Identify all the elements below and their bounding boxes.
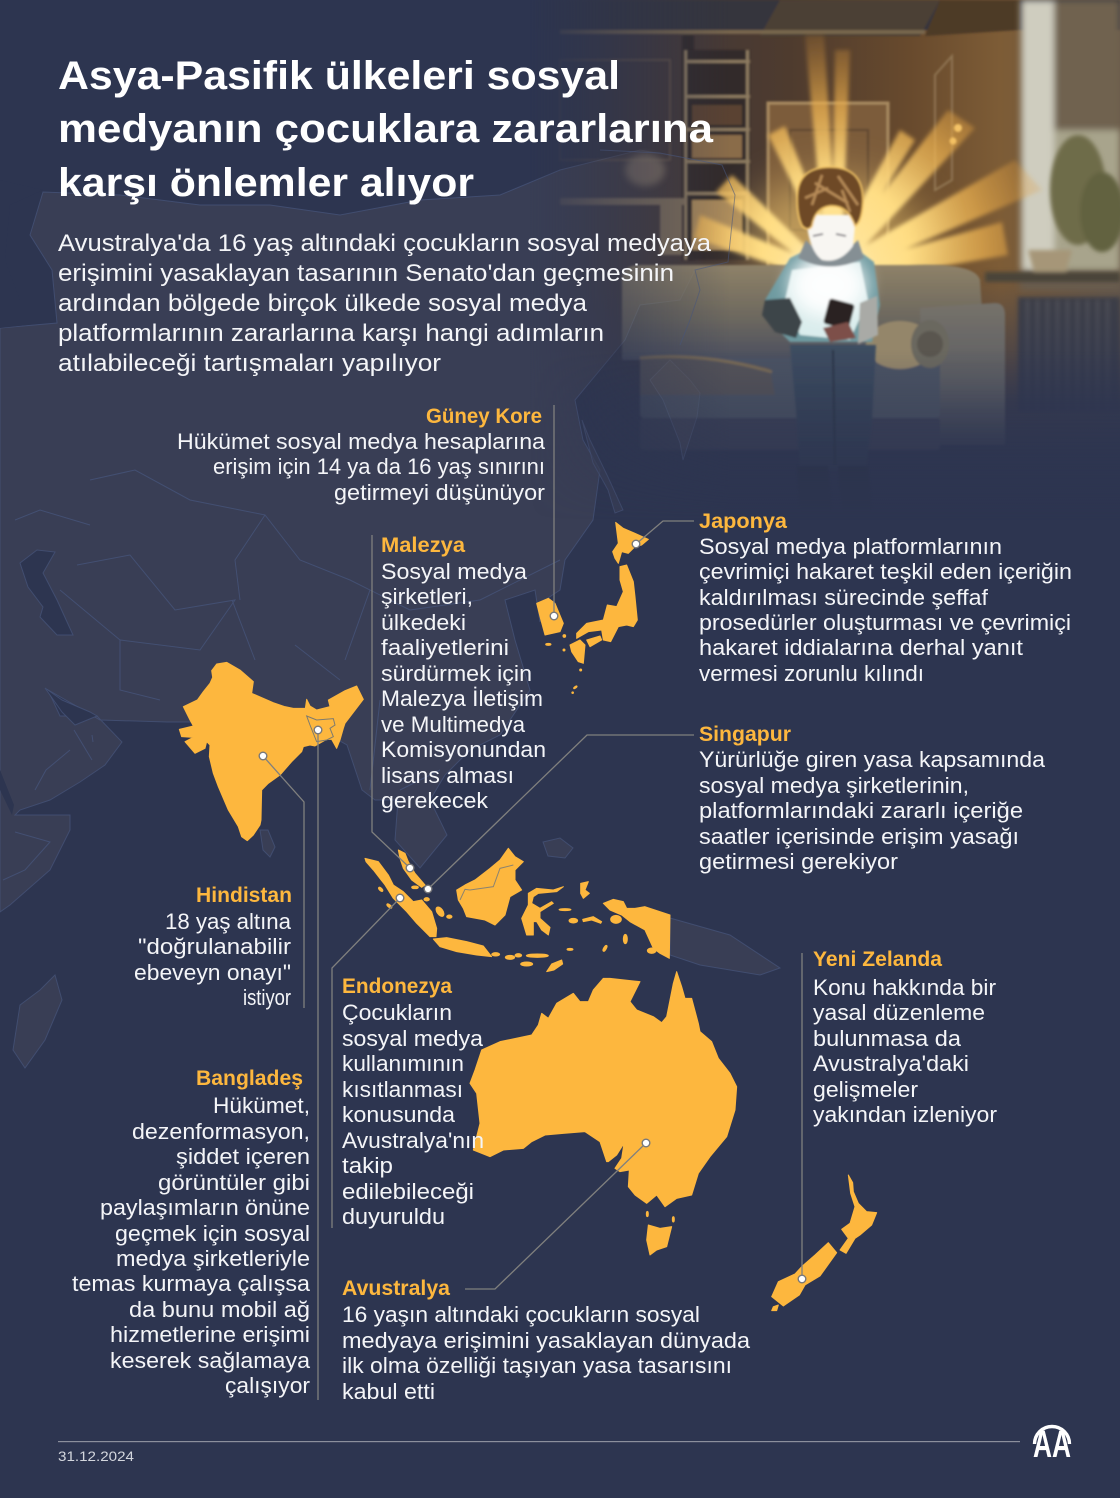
callout: Hindistan	[134, 884, 292, 1010]
logo: Anadolu Agency: AA	[1033, 1424, 1071, 1466]
callout: Güney Kore	[177, 405, 546, 505]
callout: Japonya: Japonya	[699, 510, 787, 533]
map: Australia	[470, 972, 737, 1255]
callout: Endonezya: kullanımının	[342, 1051, 464, 1076]
callout: Avustralya: Avustralya	[342, 1277, 450, 1300]
boy	[761, 166, 881, 420]
callout: Bangladeş	[72, 1067, 311, 1398]
map: India	[179, 662, 363, 841]
callout: Bangladeş: dezenformasyon,	[132, 1119, 310, 1144]
callout: Avustralya: ilk olma özelliği taşıyan yasa tasarısını	[342, 1353, 732, 1378]
callout: Bangladeş: medya şirketleriyle	[116, 1246, 310, 1271]
callout: Endonezya: Endonezya	[342, 975, 452, 998]
callout: Yeni Zelanda: yakından izleniyor	[813, 1102, 997, 1127]
location pins	[259, 540, 806, 1283]
intro text: Avustralya'da 16 yaş altındaki çocukların sosyal medyaya	[58, 230, 712, 257]
map: Japan and South Korea	[537, 522, 648, 693]
Caspian and Kara seas	[20, 550, 73, 635]
date: 31.12.2024	[58, 1448, 134, 1464]
map: New Zealand	[772, 1175, 877, 1311]
callout: Bangladeş: da bunu mobil ağ	[129, 1297, 310, 1322]
callout: Malezya: Malezya İletişim	[381, 686, 543, 711]
callout: Yeni Zelanda: yasal düzenleme	[813, 1000, 985, 1025]
callout: Singapur: sosyal medya şirketlerinin,	[699, 773, 969, 798]
callout: Bangladeş: çalışıyor	[225, 1373, 310, 1398]
sofa	[622, 265, 1005, 450]
callout: Singapur	[699, 723, 1046, 874]
intro text: erişimini yasaklayan tasarının Senato'dan geçmesinin	[58, 260, 674, 287]
callout: Endonezya: edilebileceği	[342, 1179, 474, 1204]
callout: Hindistan: istiyor	[243, 985, 291, 1010]
callout: Endonezya: Çocukların	[342, 1000, 452, 1025]
callout: Singapur: saatler içerisinde erişim yasağı	[699, 824, 1019, 849]
callout: Güney Kore: erişim için 14 ya da 16 yaş sınırını	[213, 454, 545, 479]
callout: Bangladeş: keserek sağlamaya	[110, 1348, 311, 1373]
bookshelf and fireplace	[560, 50, 750, 260]
callout: Endonezya: duyuruldu	[342, 1204, 445, 1229]
callout: Singapur: platformlarındaki zararlı içeriğe	[699, 798, 1023, 823]
callout: Malezya: lisans alması	[381, 763, 514, 788]
callout: Endonezya: konusunda	[342, 1102, 456, 1127]
Peninsular Malaysia	[398, 850, 425, 887]
callout: Güney Kore: Güney Kore	[426, 405, 542, 428]
Bangladesh	[307, 716, 335, 742]
callout: Bangladeş: Bangladeş	[196, 1067, 303, 1090]
footer rule	[58, 1441, 1020, 1442]
callout: Yeni Zelanda	[813, 948, 997, 1127]
callout: Endonezya: sosyal medya	[342, 1026, 484, 1051]
callout: Avustralya: 16 yaşın altındaki çocukların sosyal	[342, 1302, 700, 1327]
callout: Hindistan: Hindistan	[196, 884, 292, 907]
Borneo	[457, 848, 523, 925]
callout: Bangladeş: geçmek için sosyal	[115, 1221, 310, 1246]
callout: Malezya: şirketleri,	[381, 584, 473, 609]
callout: Bangladeş: Hükümet,	[213, 1093, 310, 1118]
callout: Malezya: ülkedeki	[381, 610, 466, 635]
connector lines	[263, 405, 802, 1400]
callout: Hindistan: ebeveyn onayı"	[134, 960, 291, 985]
callout: Bangladeş: temas kurmaya çalışsa	[72, 1271, 311, 1296]
callout: Endonezya	[342, 975, 484, 1229]
callout: Yeni Zelanda: bulunmasa da	[813, 1026, 962, 1051]
callout: Bangladeş: şiddet içeren	[176, 1144, 310, 1169]
callout: Japonya: Sosyal medya platformlarının	[699, 534, 1002, 559]
intro text	[58, 230, 712, 377]
intro text: atılabileceği tartışmaları yapılıyor	[58, 350, 441, 377]
callout: Endonezya: kısıtlanması	[342, 1077, 463, 1102]
callout: Singapur: getirmesi gerekiyor	[699, 849, 898, 874]
callout: Japonya: kaldırılması sürecinde şeffaf	[699, 585, 989, 610]
callout: Endonezya: Avustralya'nın	[342, 1128, 484, 1153]
rays of light	[694, 35, 1042, 282]
callout: Yeni Zelanda: gelişmeler	[813, 1077, 918, 1102]
callout: Japonya: prosedürler oluşturması ve çevrimiçi	[699, 610, 1071, 635]
callout: Yeni Zelanda: Yeni Zelanda	[813, 948, 942, 971]
callout: Hindistan: 18 yaş altına	[165, 909, 292, 934]
callout: Endonezya: takip	[342, 1153, 393, 1178]
callout: Japonya: çevrimiçi hakaret teşkil eden içeriğin	[699, 559, 1072, 584]
intro text: platformlarının zararlarına karşı hangi adımların	[58, 320, 604, 347]
door	[768, 56, 962, 273]
callout: Japonya	[699, 510, 1072, 686]
callout: Avustralya: kabul etti	[342, 1379, 435, 1404]
title: medyanın çocuklara zararlarına	[58, 107, 714, 151]
callout: Malezya: gerekecek	[381, 788, 489, 813]
callout: Japonya: hakaret iddialarına derhal yanıt	[699, 635, 1023, 660]
callout: Malezya	[381, 534, 546, 813]
callout: Hindistan: "doğrulanabilir	[138, 934, 291, 959]
title: Asya-Pasifik ülkeleri sosyal	[58, 54, 620, 98]
Java and lesser islands	[378, 882, 656, 972]
logo: Anadolu Agency	[1033, 1424, 1071, 1466]
ceiling moulding	[520, 0, 1120, 260]
dark lower room	[634, 286, 1120, 460]
callout: Güney Kore: Hükümet sosyal medya hesaplarına	[177, 429, 546, 454]
faint background world map	[0, 150, 780, 1068]
callout: Malezya: ve Multimedya	[381, 712, 526, 737]
callout: Bangladeş: hizmetlerine erişimi	[110, 1322, 310, 1347]
map: Indonesia and Malaysia	[365, 848, 670, 972]
title: karşı önlemler alıyor	[58, 161, 474, 205]
callout: Malezya: Malezya	[381, 534, 465, 557]
callout: Güney Kore: getirmeyi düşünüyor	[334, 480, 545, 505]
callout: Yeni Zelanda: Avustralya'daki	[813, 1051, 969, 1076]
callout: Avustralya	[342, 1277, 751, 1404]
callout: Avustralya: medyaya erişimini yasaklayan dünyada	[342, 1328, 751, 1353]
callout: Malezya: Komisyonundan	[381, 737, 546, 762]
hero photo: boy with glowing phone	[560, 0, 1120, 460]
callout: Singapur: Yürürlüğe giren yasa kapsamında	[699, 747, 1046, 772]
intro text: ardından bölgede birçok ülkede sosyal medya	[58, 290, 588, 317]
coastline lines over the photo	[600, 150, 735, 345]
window with curtains and plant	[1020, 0, 1120, 290]
callout: Bangladeş: görüntüler gibi	[158, 1170, 310, 1195]
callout: Yeni Zelanda: Konu hakkında bir	[813, 975, 996, 1000]
Papua	[603, 899, 670, 958]
Sumatra	[365, 858, 437, 937]
callout: Singapur: Singapur	[699, 723, 791, 746]
callout: Malezya: Sosyal medya	[381, 559, 528, 584]
callout: Japonya: vermesi zorunlu kılındı	[699, 661, 924, 686]
title	[58, 54, 714, 205]
callout: Malezya: sürdürmek için	[381, 661, 532, 686]
Sulawesi	[522, 887, 563, 935]
callout: Malezya: faaliyetlerini	[381, 635, 509, 660]
callout: Bangladeş: paylaşımların önüne	[100, 1195, 310, 1220]
